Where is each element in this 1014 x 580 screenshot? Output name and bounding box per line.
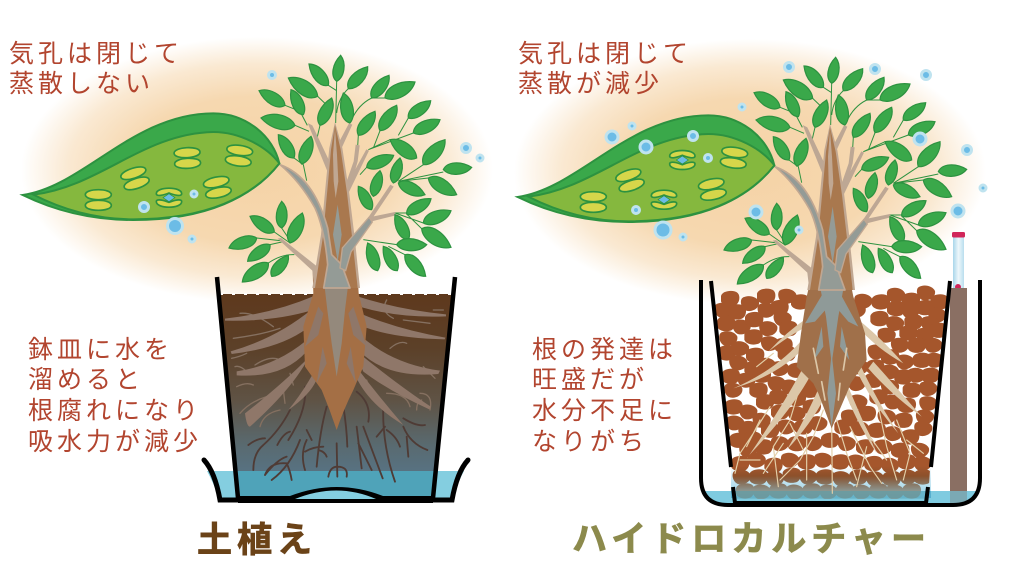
text: soil note: 根腐れになり: [28, 397, 202, 425]
enlarged leaf: soil plant: [23, 113, 279, 220]
pot soil: [220, 294, 452, 472]
enlarged leaf: hydroculture plant: [518, 115, 774, 222]
bottom water tint: [731, 466, 931, 498]
pot walls: [217, 277, 455, 498]
panel: soil pot: [204, 270, 468, 503]
pot water: [236, 471, 435, 497]
saucer: [204, 460, 468, 500]
text: hydroculture note: 旺盛だが: [532, 366, 648, 394]
text: stomata closed, hydroculture: 蒸散が減少: [518, 70, 663, 98]
background glow: soil plant: [21, 37, 493, 303]
background glow: hydroculture plant: [514, 39, 986, 305]
saucer water: [207, 471, 464, 500]
plant roots: [733, 280, 923, 493]
water vapour bubbles: soil plant: [140, 72, 483, 242]
text: hydroculture note: 水分不足に: [532, 397, 677, 425]
text: hydroculture note: なりがち: [532, 428, 648, 456]
dome water: [295, 490, 376, 499]
heading: soil: 土植え: [197, 521, 317, 560]
heading: hydroculture: ハイドロカルチャー: [572, 520, 931, 559]
gauge body water: [950, 491, 967, 503]
gauge tube: [953, 237, 964, 288]
stomata: [580, 146, 748, 212]
gauge cap: [952, 232, 965, 238]
panel: hydroculture pot: [701, 232, 980, 506]
stomata: [85, 144, 253, 210]
text: soil note: 溜めると: [28, 366, 144, 394]
pot base water: [702, 491, 978, 503]
pale tint over lowest pebbles: [731, 476, 929, 491]
text: stomata closed, hydroculture: 気孔は閉じて: [518, 40, 692, 68]
text: stomata closed, soil: 気孔は閉じて: [9, 40, 183, 68]
water vapour bubbles: hydroculture plant: [606, 62, 986, 240]
inner pot base: [238, 487, 433, 503]
tree canopy: soil plant: [227, 55, 472, 288]
outer pot: [701, 280, 980, 505]
reservoir water inside pot: [735, 491, 927, 499]
text: soil note: 鉢皿に水を: [28, 336, 173, 364]
inner pot walls: [711, 281, 950, 503]
tree canopy: hydroculture plant: [722, 57, 967, 290]
clay pebbles: [714, 285, 949, 499]
gauge body: [950, 288, 967, 503]
soil surface: [220, 293, 452, 295]
plant roots: [225, 270, 446, 482]
text: soil note: 吸水力が減少: [28, 428, 202, 456]
text: hydroculture note: 根の発達は: [532, 336, 677, 364]
water level gauge: [950, 232, 967, 503]
text: stomata closed, soil: 蒸散しない: [9, 70, 154, 98]
gauge indicator: [955, 284, 961, 290]
inner pot base: [733, 501, 928, 506]
